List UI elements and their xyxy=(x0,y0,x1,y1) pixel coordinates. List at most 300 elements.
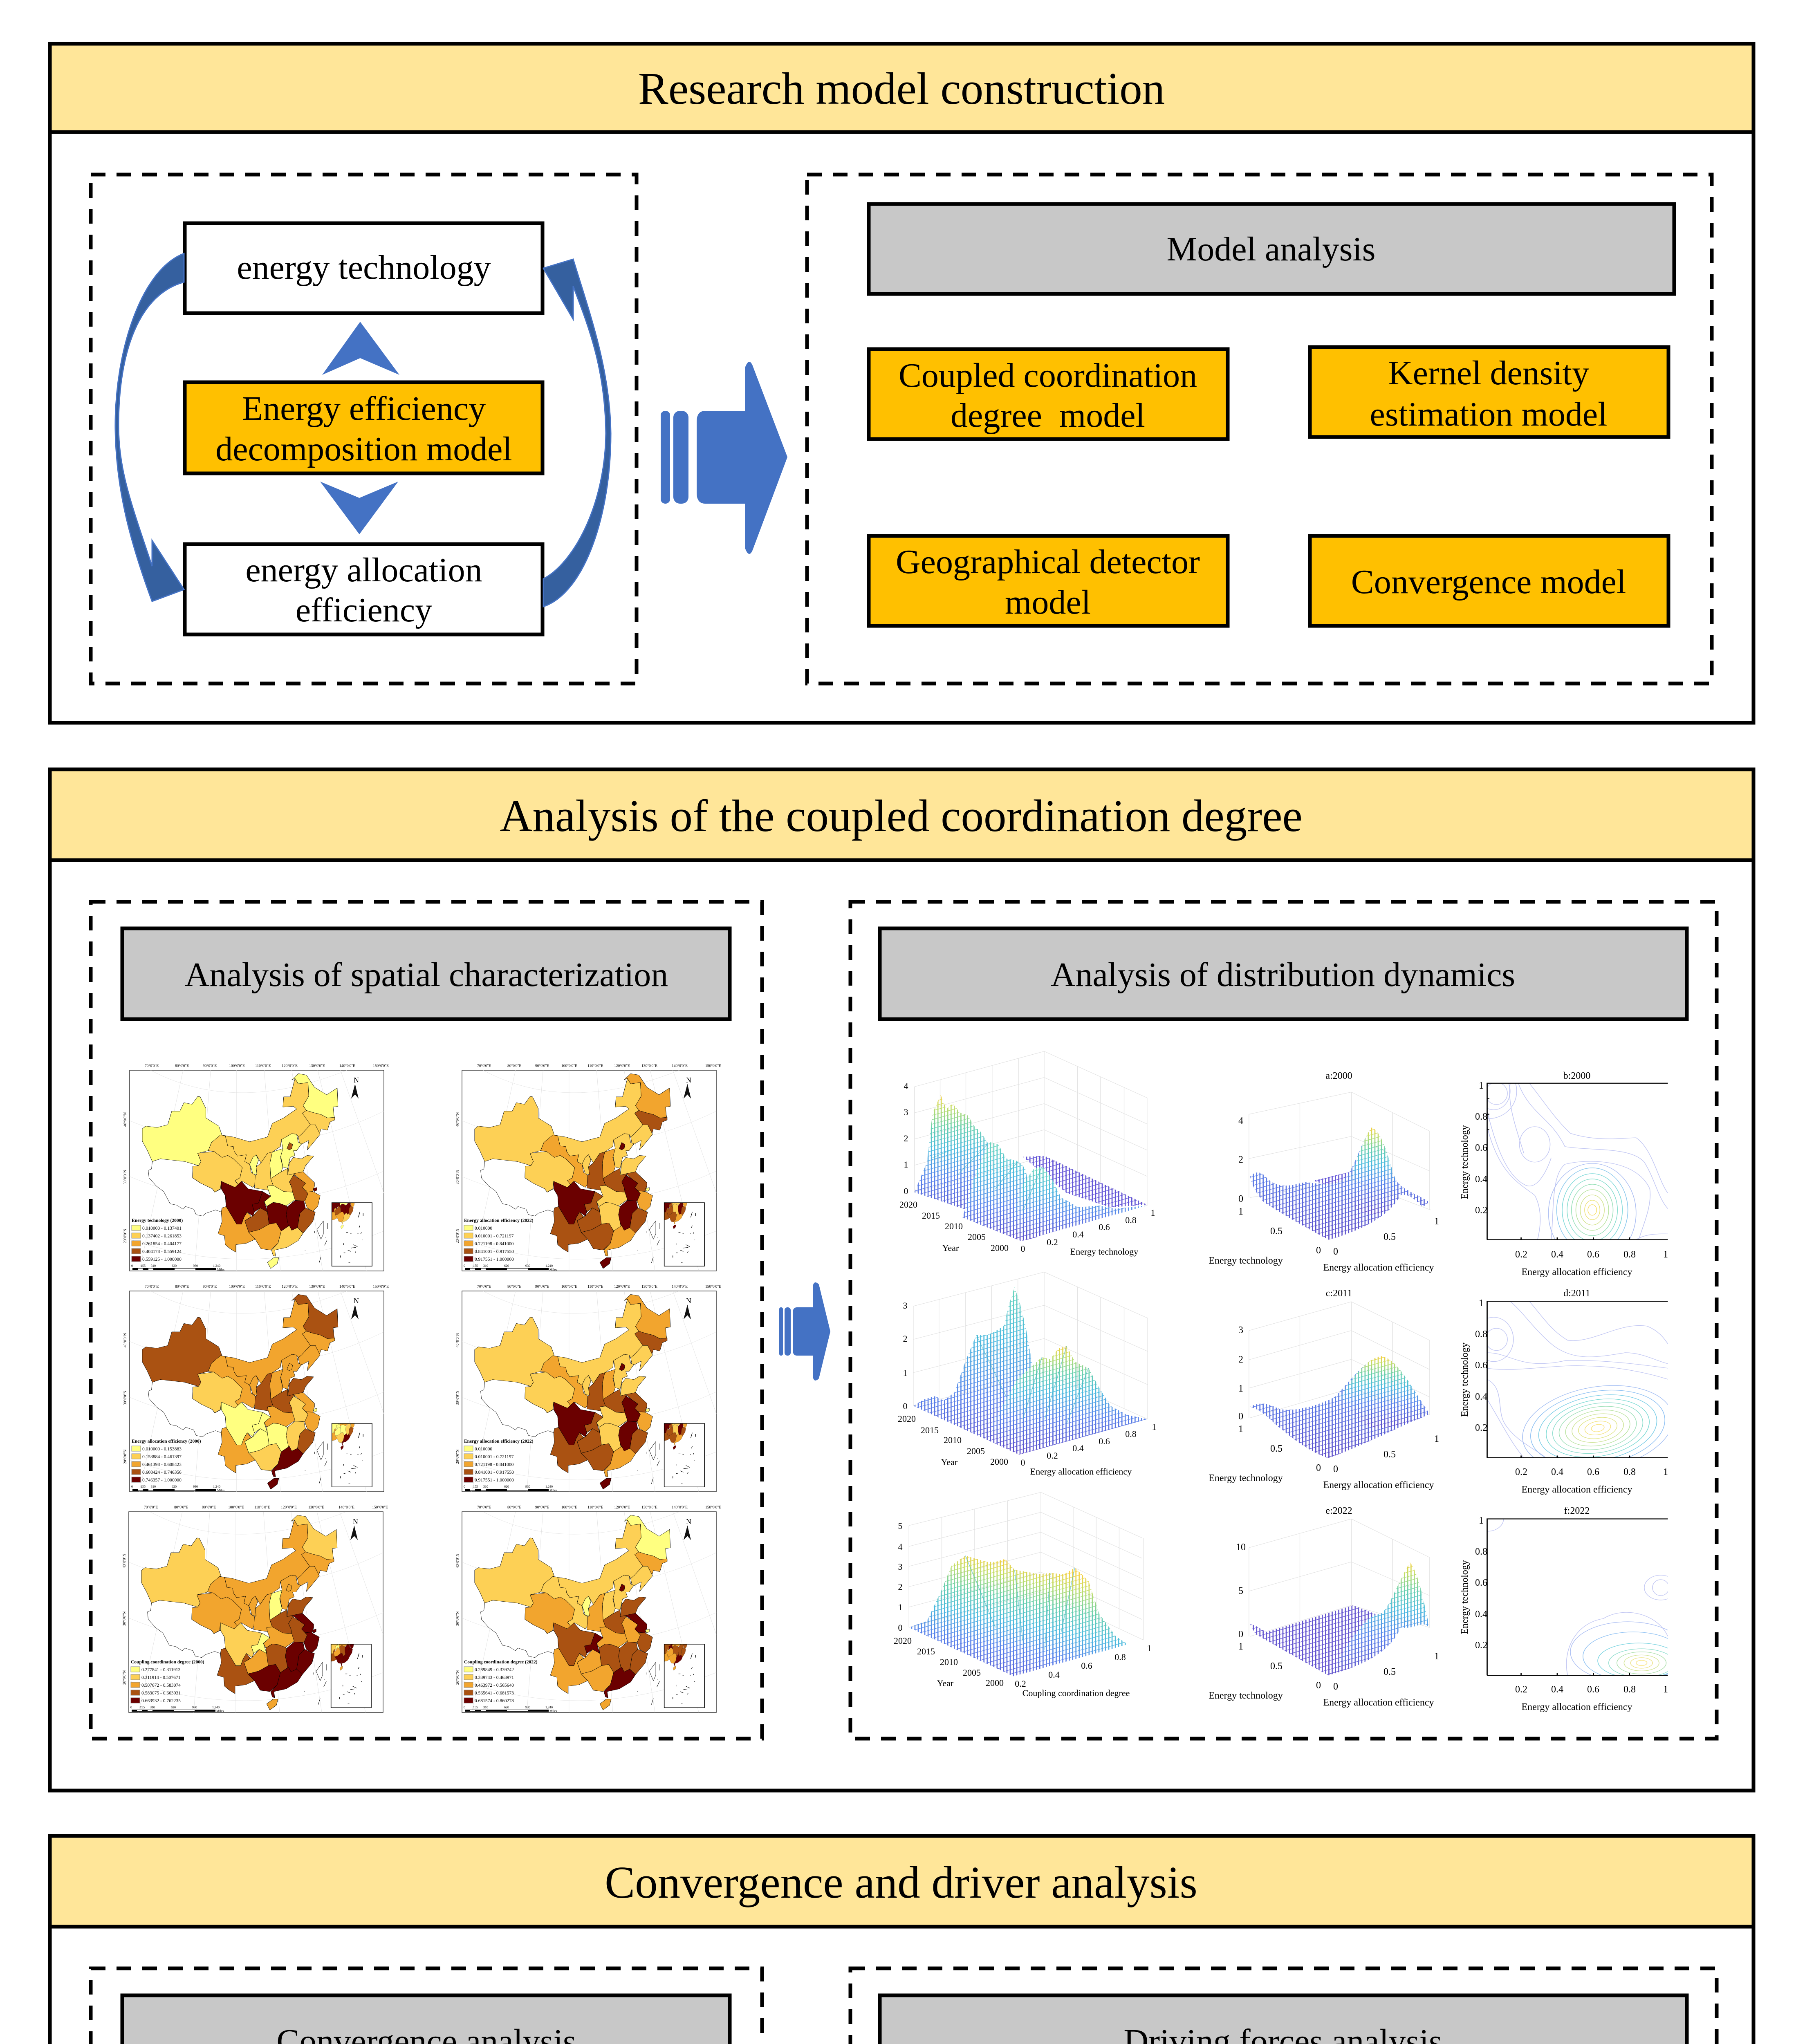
map: coupling coordination degree 2000: 1,240 xyxy=(212,1706,220,1709)
chart: e:2022 surface: Energy technology xyxy=(1209,1690,1283,1701)
section title band xyxy=(50,44,1753,132)
map: energy allocation efficiency 2022: 100°0'0"E xyxy=(561,1064,577,1068)
map: coupling coordination degree 2000: 20°0'0"N xyxy=(122,1670,127,1685)
chart: 3D kernel density of energy allocation efficiency: 0 xyxy=(903,1401,908,1411)
chart: a:2000 surface: 4 xyxy=(1238,1116,1243,1126)
heading: spatial characterization xyxy=(122,928,730,1019)
chart: d:2011 contour: 0.4 xyxy=(1551,1467,1563,1477)
map: coupling coordination degree 2022: 0.339743 - 0.463971 xyxy=(475,1675,514,1680)
chart: a:2000 surface xyxy=(1209,1071,1439,1273)
map: energy technology 2000: 0 xyxy=(131,1264,133,1268)
map: energy allocation efficiency 2022: 90°0'0"E xyxy=(535,1064,549,1068)
map: energy allocation efficiency 2000: 80°0'0"E xyxy=(175,1284,189,1289)
map: coupling coordination degree 2022: 0.463972 - 0.565640 xyxy=(475,1683,514,1688)
chart: d:2011 contour: 0.6 xyxy=(1587,1467,1599,1477)
map: energy allocation efficiency 2022: 80°0'0"E xyxy=(507,1064,521,1068)
chart: 3D kernel density of energy technology: 2005 xyxy=(968,1232,986,1242)
chart: 3D kernel density of energy technology: 0.8 xyxy=(1125,1215,1137,1225)
chart: 3D kernel density of coupling coordination degree: 2015 xyxy=(917,1646,935,1656)
map: coupling coordination degree 2022: 0 xyxy=(464,1706,465,1709)
map: energy technology 2000: 1,240 xyxy=(213,1264,220,1268)
map: energy allocation efficiency 2000: N xyxy=(354,1297,359,1305)
map: energy technology 2000: 930 xyxy=(193,1264,198,1268)
chart: e:2022 surface: 5 xyxy=(1238,1586,1243,1596)
chart: 3D kernel density of energy allocation efficiency: 0.4 xyxy=(1072,1443,1084,1453)
map: coupling coordination degree 2022: Miles xyxy=(549,1709,557,1713)
heading: convergence analysis xyxy=(122,1995,730,2044)
map: energy technology 2000: N xyxy=(354,1076,359,1084)
box: kernel density estimation model: Kernel density xyxy=(1388,354,1589,392)
chart: e:2022 surface: 0.5 xyxy=(1270,1661,1283,1672)
chart: 3D kernel density of energy technology: 2010 xyxy=(945,1221,963,1231)
panel: decomposition framework xyxy=(91,175,637,684)
map: energy allocation efficiency 2000: Energy allocation efficiency (2000) xyxy=(132,1439,201,1444)
section title band xyxy=(50,769,1753,860)
chart: 3D kernel density of coupling coordination degree: 1 xyxy=(1147,1643,1151,1653)
box: energy allocation efficiency: energy allocation xyxy=(245,551,482,589)
map: coupling coordination degree 2000: 155 xyxy=(140,1706,145,1709)
chart: 3D kernel density of energy allocation efficiency: Year xyxy=(941,1457,958,1467)
map: energy allocation efficiency 2022: Energy allocation efficiency (2022) xyxy=(464,1218,534,1223)
box: geographical detector model xyxy=(869,536,1228,626)
chart: a:2000 surface: a:2000 xyxy=(1325,1071,1352,1081)
map: energy allocation efficiency 2000: 0.153884 - 0.461397 xyxy=(142,1455,182,1459)
heading: spatial characterization: Analysis of spatial characterization xyxy=(185,956,668,994)
chart: 3D kernel density of energy technology: 1 xyxy=(1150,1208,1155,1218)
map: energy allocation efficiency 2022: 20°0'0"N xyxy=(455,1229,460,1243)
box: coupled coordination degree model xyxy=(869,349,1228,439)
chart: 3D kernel density of coupling coordination degree: Year xyxy=(937,1678,954,1688)
chart: a:2000 surface: 0.5 xyxy=(1270,1226,1283,1237)
box: energy allocation efficiency xyxy=(185,544,543,634)
chart: f:2022 contour: 0.8 xyxy=(1623,1684,1636,1695)
chart: 3D kernel density of energy allocation efficiency: 0.2 xyxy=(1047,1450,1058,1461)
map: energy allocation efficiency 2022: 0.721198 - 0.841000 xyxy=(475,1242,514,1246)
chart: b:2000 contour: 0.4 xyxy=(1551,1249,1563,1260)
chart: c:2011 surface: 2 xyxy=(1238,1354,1243,1365)
map: coupling coordination degree 2022: 110°0'0"E xyxy=(587,1505,603,1510)
map: energy allocation efficiency 2000: 1,240 xyxy=(213,1485,220,1488)
arrow: curved right xyxy=(543,259,611,607)
chart: a:2000 surface: 1 xyxy=(1434,1216,1439,1227)
map: energy allocation efficiency 2022: 0.010001 - 0.721197 xyxy=(475,1234,514,1239)
chart: b:2000 contour: Energy allocation efficiency xyxy=(1522,1267,1632,1278)
chart: d:2011 contour: 0.2 xyxy=(1475,1423,1487,1433)
box: coupled coordination degree model: Coupled coordination xyxy=(899,356,1197,394)
chart: 3D kernel density of energy technology: 4 xyxy=(904,1081,908,1091)
map: energy allocation efficiency 2022 (second): 100°0'0"E xyxy=(561,1284,577,1289)
box: energy efficiency decomposition model: Energy efficiency xyxy=(242,390,486,428)
chart: 3D kernel density of coupling coordination degree: 2020 xyxy=(894,1636,912,1646)
chart: 3D kernel density of coupling coordination degree: 2000 xyxy=(986,1678,1004,1688)
map: coupling coordination degree 2022: 130°0'0"E xyxy=(641,1505,657,1510)
chart: b:2000 contour: 0.8 xyxy=(1623,1249,1636,1260)
chart: 3D kernel density of coupling coordination degree: 0.4 xyxy=(1048,1670,1060,1680)
chart: d:2011 contour: 1 xyxy=(1663,1467,1668,1477)
chart: a:2000 surface: 0 xyxy=(1333,1246,1338,1257)
map: energy technology 2000: 0.559125 - 1.000000 xyxy=(142,1257,182,1262)
map: energy technology 2000: 30°0'0"N xyxy=(123,1170,128,1184)
chart: b:2000 contour: 0.2 xyxy=(1475,1205,1487,1216)
chart: b:2000 contour: 1 xyxy=(1663,1249,1668,1260)
map: coupling coordination degree 2000: 0.277841 - 0.311913 xyxy=(141,1667,181,1672)
map: coupling coordination degree 2022: 140°0'0"E xyxy=(672,1505,688,1510)
map: coupling coordination degree 2000: 0.311914 - 0.507671 xyxy=(141,1675,181,1680)
map: energy allocation efficiency 2000: 30°0'0"N xyxy=(123,1391,128,1405)
map: coupling coordination degree 2000: 930 xyxy=(192,1706,197,1709)
map: energy allocation efficiency 2022: 155 xyxy=(473,1264,478,1268)
map: energy allocation efficiency 2022: 40°0'0"N xyxy=(455,1112,460,1127)
map: energy allocation efficiency 2022: Miles xyxy=(549,1268,557,1271)
map: energy allocation efficiency 2022: 120°0'0"E xyxy=(614,1064,630,1068)
map: coupling coordination degree 2022: 310 xyxy=(483,1706,488,1709)
map: coupling coordination degree 2000: 0.507672 - 0.583074 xyxy=(141,1683,181,1688)
chart: 3D kernel density of energy technology xyxy=(899,1051,1155,1257)
box: kernel density estimation model: estimation model xyxy=(1370,395,1607,433)
map: coupling coordination degree 2022: 150°0'0"E xyxy=(705,1505,721,1510)
chart: d:2011 contour: Energy technology xyxy=(1460,1342,1470,1417)
map: energy allocation efficiency 2000: 0.746357 - 1.000000 xyxy=(142,1478,182,1483)
chart: 3D kernel density of energy technology: 0.2 xyxy=(1047,1237,1058,1247)
map: coupling coordination degree 2022: 620 xyxy=(504,1706,509,1709)
chart: a:2000 surface: 0 xyxy=(1238,1194,1243,1204)
chart: e:2022 surface: 0 xyxy=(1238,1629,1243,1640)
map: energy allocation efficiency 2022: 0.917551 - 1.000000 xyxy=(475,1257,514,1262)
chart: 3D kernel density of energy technology: 0 xyxy=(904,1186,908,1196)
map: energy technology 2000: 0.404178 - 0.559124 xyxy=(142,1249,182,1254)
map: energy technology 2000: 40°0'0"N xyxy=(123,1112,128,1127)
map: energy allocation efficiency 2022 (second): 0.721198 - 0.841000 xyxy=(475,1462,514,1467)
chart: b:2000 contour: Energy technology xyxy=(1460,1125,1470,1199)
map: energy technology 2000: 0.261854 - 0.404177 xyxy=(142,1242,182,1246)
map: energy allocation efficiency 2000: 0.461398 - 0.608423 xyxy=(142,1462,182,1467)
arrow: spatial to distribution xyxy=(779,1282,830,1381)
chart: 3D kernel density of energy allocation efficiency: 1 xyxy=(1152,1422,1156,1432)
chart: 3D kernel density of energy technology: 1 xyxy=(904,1159,908,1170)
map: coupling coordination degree 2000: 90°0'0"E xyxy=(202,1505,216,1510)
chart: c:2011 surface xyxy=(1209,1288,1439,1490)
map: energy allocation efficiency 2022 xyxy=(455,1064,721,1271)
map: coupling coordination degree 2000: 140°0'0"E xyxy=(339,1505,354,1510)
section: Research model construction xyxy=(50,44,1753,723)
chart: f:2022 contour xyxy=(1460,1506,1685,1712)
chart: d:2011 contour: 0.6 xyxy=(1475,1360,1487,1371)
chart: 3D kernel density of energy technology: 3 xyxy=(904,1107,908,1117)
chart: e:2022 surface: Energy allocation efficiency xyxy=(1323,1697,1434,1708)
map: coupling coordination degree 2022: 1,240 xyxy=(545,1706,553,1709)
chart: a:2000 surface: 0 xyxy=(1316,1245,1321,1256)
panel: spatial characterization xyxy=(91,902,762,1739)
map: coupling coordination degree 2022: 100°0'0"E xyxy=(561,1505,577,1510)
chart: 3D kernel density of energy technology: Energy technology xyxy=(1070,1246,1138,1257)
map: coupling coordination degree 2000: 150°0'0"E xyxy=(372,1505,388,1510)
chart: b:2000 contour: 0.2 xyxy=(1515,1249,1527,1260)
map: energy allocation efficiency 2000: 155 xyxy=(141,1485,146,1488)
chart: 3D kernel density of coupling coordination degree: 1 xyxy=(898,1602,903,1612)
chart: e:2022 surface: 1 xyxy=(1238,1641,1243,1652)
map: energy technology 2000: 100°0'0"E xyxy=(229,1064,245,1068)
arrow: curved left xyxy=(115,253,184,601)
map: coupling coordination degree 2000: 0 xyxy=(130,1706,132,1709)
box: coupled coordination degree model: degree model xyxy=(951,397,1145,435)
chart: d:2011 contour: Energy allocation efficiency xyxy=(1522,1484,1632,1495)
chart: f:2022 contour: 0.4 xyxy=(1551,1684,1563,1695)
panel: convergence analysis xyxy=(91,1968,762,2044)
map: coupling coordination degree 2000: 100°0'0"E xyxy=(228,1505,244,1510)
chart: d:2011 contour: 0.8 xyxy=(1475,1329,1487,1340)
heading: distribution dynamics: Analysis of distribution dynamics xyxy=(1051,956,1515,994)
chart: 3D kernel density of coupling coordination degree xyxy=(894,1492,1151,1698)
chart: c:2011 surface: 1 xyxy=(1238,1424,1243,1434)
map: energy allocation efficiency 2022 (second): 155 xyxy=(473,1485,478,1488)
chart: 3D kernel density of coupling coordination degree: 3 xyxy=(898,1562,903,1572)
map: energy allocation efficiency 2022 (second): 70°0'0"E xyxy=(477,1284,491,1289)
chart: c:2011 surface: 0.5 xyxy=(1270,1443,1283,1454)
chart: 3D kernel density of coupling coordination degree: 5 xyxy=(898,1521,903,1531)
chart: d:2011 contour: 0.4 xyxy=(1475,1392,1487,1402)
map: coupling coordination degree 2022: 80°0'0"E xyxy=(507,1505,521,1510)
section: Convergence and driver analysis xyxy=(50,1836,1753,2044)
map: energy allocation efficiency 2022: 140°0'0"E xyxy=(672,1064,688,1068)
heading: model analysis xyxy=(869,204,1674,294)
chart: e:2022 surface: 10 xyxy=(1236,1542,1246,1553)
chart: b:2000 contour xyxy=(1460,1064,1668,1278)
map: energy technology 2000: 155 xyxy=(141,1264,146,1268)
chart: f:2022 contour: 0.4 xyxy=(1475,1609,1487,1620)
map: coupling coordination degree 2000: 30°0'0"N xyxy=(122,1611,127,1626)
map: energy allocation efficiency 2022: 1,240 xyxy=(545,1264,553,1268)
map: coupling coordination degree 2000: 40°0'0"N xyxy=(122,1554,127,1568)
map: coupling coordination degree 2000: N xyxy=(353,1517,358,1526)
map: coupling coordination degree 2022: 0.289849 - 0.339742 xyxy=(475,1667,514,1672)
map: energy technology 2000: 620 xyxy=(172,1264,177,1268)
chart: b:2000 contour: 0.4 xyxy=(1475,1174,1487,1185)
chart: 3D kernel density of energy allocation efficiency: 2020 xyxy=(898,1414,916,1424)
heading: driving forces analysis xyxy=(880,1995,1687,2044)
chart: f:2022 contour: 0.8 xyxy=(1475,1546,1487,1557)
chart: a:2000 surface: 1 xyxy=(1238,1206,1243,1217)
chart: 3D kernel density of coupling coordination degree: 0.2 xyxy=(1015,1679,1026,1689)
map: coupling coordination degree 2000: Miles xyxy=(216,1709,224,1713)
map: coupling coordination degree 2022: 120°0'0"E xyxy=(614,1505,630,1510)
chart: 3D kernel density of energy technology: Year xyxy=(942,1243,959,1253)
chart: e:2022 surface xyxy=(1209,1506,1439,1708)
map: coupling coordination degree 2022: 30°0'0"N xyxy=(455,1611,460,1626)
map: energy allocation efficiency 2000: 140°0'0"E xyxy=(339,1284,355,1289)
box: energy technology xyxy=(185,223,543,313)
chart: f:2022 contour: Energy allocation efficiency xyxy=(1522,1702,1632,1712)
map: energy allocation efficiency 2022: 130°0'0"E xyxy=(641,1064,657,1068)
chart: 3D kernel density of energy allocation efficiency: 2010 xyxy=(944,1435,962,1445)
chart: 3D kernel density of energy allocation efficiency: 0.8 xyxy=(1125,1429,1137,1439)
map: coupling coordination degree 2000: 0.583075 - 0.663931 xyxy=(141,1691,181,1696)
chart: 3D kernel density of energy allocation efficiency: 2 xyxy=(903,1334,908,1344)
chart: 3D kernel density of energy allocation efficiency: Energy allocation efficiency xyxy=(1030,1466,1132,1477)
chart: b:2000 contour: 0.6 xyxy=(1475,1143,1487,1153)
map: coupling coordination degree 2000: 310 xyxy=(150,1706,155,1709)
chart: d:2011 contour xyxy=(1460,1288,1685,1495)
map: energy allocation efficiency 2000: 0.608424 - 0.746356 xyxy=(142,1470,182,1475)
map: energy technology 2000: 150°0'0"E xyxy=(373,1064,389,1068)
map: energy allocation efficiency 2022: 930 xyxy=(525,1264,530,1268)
map: coupling coordination degree 2022 xyxy=(455,1505,721,1713)
arrow: down to energy allocation xyxy=(320,482,398,534)
map: coupling coordination degree 2000: 80°0'0"E xyxy=(174,1505,188,1510)
chart: c:2011 surface: 0 xyxy=(1316,1463,1321,1473)
chart: d:2011 contour: 1 xyxy=(1479,1298,1484,1309)
map: energy technology 2000: 140°0'0"E xyxy=(339,1064,355,1068)
panel: distribution dynamics xyxy=(850,902,1717,1739)
chart: 3D kernel density of coupling coordination degree: 2005 xyxy=(963,1667,981,1678)
chart: b:2000 contour: 0.8 xyxy=(1475,1112,1487,1122)
map: coupling coordination degree 2000 xyxy=(122,1505,388,1713)
map: coupling coordination degree 2022: 930 xyxy=(525,1706,530,1709)
chart: 3D kernel density of coupling coordination degree: 0 xyxy=(898,1623,903,1633)
chart: f:2022 contour: 0.2 xyxy=(1475,1640,1487,1651)
map: energy technology 2000: 110°0'0"E xyxy=(255,1064,271,1068)
chart: b:2000 contour: b:2000 xyxy=(1563,1071,1590,1081)
map: energy allocation efficiency 2022 (second): 0.010001 - 0.721197 xyxy=(475,1455,514,1459)
chart: c:2011 surface: 3 xyxy=(1238,1325,1243,1336)
box: convergence model xyxy=(1310,536,1668,626)
map: coupling coordination degree 2022: 40°0'0"N xyxy=(455,1554,460,1568)
map: energy allocation efficiency 2022 (second): Energy allocation efficiency (2022) xyxy=(464,1439,534,1444)
chart: c:2011 surface: 1 xyxy=(1434,1434,1439,1444)
map: energy allocation efficiency 2022 (second): 0 xyxy=(464,1485,465,1488)
map: energy technology 2000: 310 xyxy=(151,1264,156,1268)
map: energy allocation efficiency 2022 (second): 20°0'0"N xyxy=(455,1450,460,1464)
map: energy allocation efficiency 2022 (second): N xyxy=(686,1297,691,1305)
chart: 3D kernel density of energy technology: 2 xyxy=(904,1133,908,1143)
map: energy allocation efficiency 2022: 110°0'0"E xyxy=(587,1064,603,1068)
map: coupling coordination degree 2000: 120°0'0"E xyxy=(281,1505,297,1510)
map: energy technology 2000: 90°0'0"E xyxy=(203,1064,217,1068)
map: energy allocation efficiency 2000 xyxy=(123,1284,389,1492)
box: geographical detector model: model xyxy=(1005,583,1091,621)
map: energy allocation efficiency 2000: 90°0'0"E xyxy=(203,1284,217,1289)
box: energy efficiency decomposition model xyxy=(185,382,543,473)
map: energy technology 2000 xyxy=(123,1064,389,1271)
chart: 3D kernel density of coupling coordination degree: 2010 xyxy=(940,1657,958,1667)
box: convergence model: Convergence model xyxy=(1351,563,1626,601)
map: energy technology 2000: 0.137402 - 0.261853 xyxy=(142,1234,182,1239)
chart: 3D kernel density of energy technology: 0.6 xyxy=(1099,1222,1110,1232)
map: coupling coordination degree 2000: 0.663932 - 0.762235 xyxy=(141,1699,181,1703)
box: energy efficiency decomposition model: decomposition model xyxy=(215,430,512,468)
map: energy allocation efficiency 2022: 0 xyxy=(464,1264,465,1268)
arrow: up to energy technology xyxy=(322,322,399,375)
map: energy allocation efficiency 2022: 0.841001 - 0.917550 xyxy=(475,1249,514,1254)
chart: 3D kernel density of energy allocation efficiency: 2015 xyxy=(921,1425,939,1435)
chart: 3D kernel density of coupling coordination degree: Coupling coordination degree xyxy=(1022,1688,1130,1698)
chart: c:2011 surface: 1 xyxy=(1238,1383,1243,1394)
map: energy allocation efficiency 2000: 0.010000 - 0.153883 xyxy=(142,1447,182,1452)
chart: c:2011 surface: 0.5 xyxy=(1383,1449,1396,1460)
map: energy allocation efficiency 2022: 310 xyxy=(483,1264,488,1268)
map: energy allocation efficiency 2000: Miles xyxy=(217,1488,224,1492)
map: energy allocation efficiency 2000: 70°0'0"E xyxy=(145,1284,159,1289)
map: energy allocation efficiency 2022 (second): 120°0'0"E xyxy=(614,1284,630,1289)
section title band: Research model construction xyxy=(638,64,1165,114)
map: energy allocation efficiency 2000: 110°0'0"E xyxy=(255,1284,271,1289)
map: coupling coordination degree 2022: 0.681574 - 0.860278 xyxy=(475,1699,514,1703)
map: energy allocation efficiency 2022 (second): 0.917551 - 1.000000 xyxy=(475,1478,514,1483)
chart: 3D kernel density of energy technology: 2020 xyxy=(899,1199,917,1210)
map: coupling coordination degree 2022: 155 xyxy=(473,1706,478,1709)
map: energy allocation efficiency 2000: 930 xyxy=(193,1485,198,1488)
map: energy technology 2000: Energy technology (2000) xyxy=(132,1218,183,1223)
arrow: framework to model analysis xyxy=(661,362,787,554)
chart: 3D kernel density of energy allocation efficiency: 0.6 xyxy=(1099,1436,1110,1446)
chart: 3D kernel density of energy allocation efficiency xyxy=(898,1272,1156,1477)
map: energy allocation efficiency 2022: 0.010000 xyxy=(475,1226,492,1231)
map: energy allocation efficiency 2022 (second): 930 xyxy=(525,1485,530,1488)
map: coupling coordination degree 2022: 20°0'0"N xyxy=(455,1670,460,1685)
map: coupling coordination degree 2000: 110°0'0"E xyxy=(254,1505,270,1510)
chart: d:2011 contour: 0.2 xyxy=(1515,1467,1527,1477)
map: energy technology 2000: 130°0'0"E xyxy=(309,1064,325,1068)
chart: 3D kernel density of coupling coordination degree: 0.6 xyxy=(1081,1661,1092,1671)
map: energy technology 2000: 80°0'0"E xyxy=(175,1064,189,1068)
chart: f:2022 contour: f:2022 xyxy=(1564,1506,1590,1516)
map: energy allocation efficiency 2000: 40°0'0"N xyxy=(123,1333,128,1347)
map: energy technology 2000: 0.010000 - 0.137401 xyxy=(142,1226,182,1231)
chart: 3D kernel density of energy allocation efficiency: 2000 xyxy=(990,1457,1008,1467)
section title band: Convergence and driver analysis xyxy=(605,1858,1197,1908)
map: energy allocation efficiency 2022: 70°0'0"E xyxy=(477,1064,491,1068)
chart: d:2011 contour: d:2011 xyxy=(1563,1288,1590,1299)
map: coupling coordination degree 2022: Coupling coordination degree (2022) xyxy=(464,1660,538,1665)
chart: e:2022 surface: e:2022 xyxy=(1325,1506,1352,1516)
chart: 3D kernel density of coupling coordination degree: 2 xyxy=(898,1582,903,1592)
heading: distribution dynamics xyxy=(880,928,1687,1019)
map: energy allocation efficiency 2000: 120°0'0"E xyxy=(282,1284,298,1289)
heading: model analysis: Model analysis xyxy=(1167,230,1375,268)
map: energy allocation efficiency 2000: 130°0'0"E xyxy=(309,1284,325,1289)
chart: a:2000 surface: Energy technology xyxy=(1209,1255,1283,1266)
map: energy allocation efficiency 2022 (second): 1,240 xyxy=(545,1485,553,1488)
chart: c:2011 surface: Energy technology xyxy=(1209,1473,1283,1484)
map: energy technology 2000: 20°0'0"N xyxy=(123,1229,128,1243)
chart: f:2022 contour: Energy technology xyxy=(1460,1560,1470,1634)
map: energy allocation efficiency 2022 (second) xyxy=(455,1284,721,1492)
chart: 3D kernel density of energy allocation efficiency: 3 xyxy=(903,1300,908,1311)
chart: b:2000 contour: 1 xyxy=(1479,1080,1484,1091)
chart: e:2022 surface: 0.5 xyxy=(1383,1667,1396,1677)
chart: 3D kernel density of energy allocation efficiency: 1 xyxy=(903,1368,908,1378)
chart: 3D kernel density of coupling coordination degree: 0.8 xyxy=(1114,1652,1126,1662)
map: energy allocation efficiency 2022: 620 xyxy=(504,1264,509,1268)
panel: driving forces analysis xyxy=(850,1968,1717,2044)
chart: e:2022 surface: 1 xyxy=(1434,1651,1439,1662)
map: energy allocation efficiency 2022 (second): 310 xyxy=(483,1485,488,1488)
panel: model analysis xyxy=(807,175,1712,684)
map: energy allocation efficiency 2022 (second): 0.010000 xyxy=(475,1447,492,1452)
chart: f:2022 contour: 0.2 xyxy=(1515,1684,1527,1695)
chart: 3D kernel density of energy allocation efficiency: 2005 xyxy=(967,1446,985,1456)
chart: f:2022 contour: 0.6 xyxy=(1587,1684,1599,1695)
map: energy allocation efficiency 2000: 0 xyxy=(131,1485,133,1488)
map: coupling coordination degree 2022: 90°0'0"E xyxy=(535,1505,549,1510)
chart: c:2011 surface: Energy allocation efficiency xyxy=(1323,1480,1434,1490)
map: energy allocation efficiency 2022 (second): 140°0'0"E xyxy=(672,1284,688,1289)
chart: c:2011 surface: 0 xyxy=(1333,1464,1338,1475)
map: energy allocation efficiency 2022 (second): 150°0'0"E xyxy=(705,1284,721,1289)
map: energy allocation efficiency 2022 (second): 130°0'0"E xyxy=(641,1284,657,1289)
chart: f:2022 contour: 0.6 xyxy=(1475,1578,1487,1588)
chart: a:2000 surface: 0.5 xyxy=(1383,1232,1396,1242)
map: energy allocation efficiency 2022 (second): 620 xyxy=(504,1485,509,1488)
